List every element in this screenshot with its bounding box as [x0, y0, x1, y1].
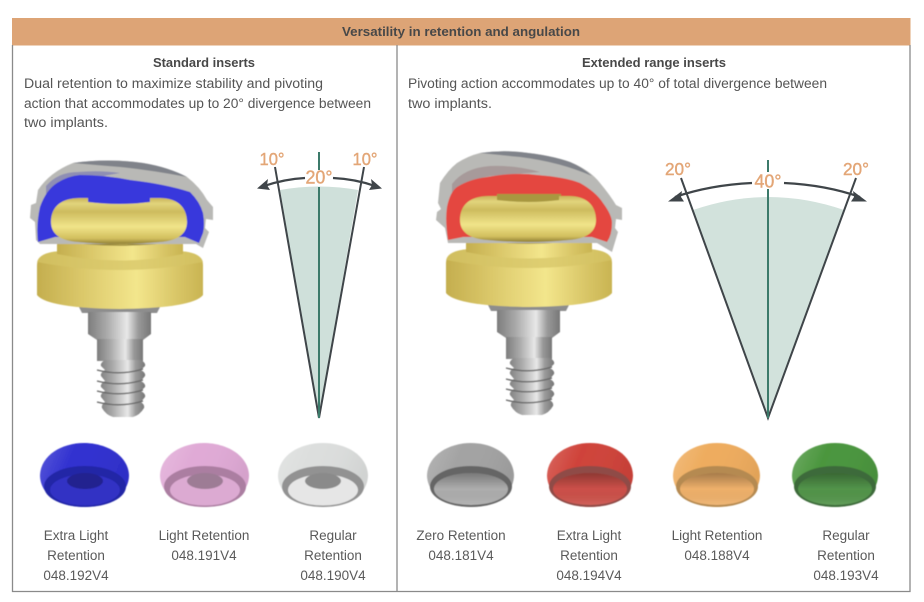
description: standard inserts: action that accommodates up to 20° divergence between: [24, 96, 371, 111]
label: light retention 048.188V4: [672, 528, 762, 563]
insert: grey zero: [427, 443, 514, 507]
label: extra light retention 048.194V4: Retention: [560, 548, 618, 563]
label: extra light retention 048.192V4: 048.192V4: [43, 568, 109, 583]
implant with red insert: [436, 151, 622, 415]
label: light retention 048.188V4: Light Retention: [672, 528, 762, 543]
label: regular retention 048.193V4: 048.193V4: [813, 568, 879, 583]
description: extended range inserts: two implants.: [408, 96, 492, 111]
insert: red extra light: [547, 443, 633, 507]
description: standard inserts: two implants.: [24, 115, 108, 130]
label: 20 degrees left: 20°: [665, 159, 691, 179]
insert: pink light: [160, 443, 249, 507]
label: extra light retention 048.194V4: Extra Light: [557, 528, 622, 543]
panel: standard inserts: [24, 56, 382, 583]
label: regular retention 048.190V4: Retention: [304, 548, 362, 563]
label: regular retention 048.190V4: [300, 528, 366, 583]
label: light retention 048.191V4: 048.191V4: [171, 548, 237, 563]
heading: extended range inserts: Extended range inserts: [582, 56, 726, 70]
label: regular retention 048.193V4: Regular: [822, 528, 870, 543]
label: regular retention 048.190V4: Regular: [309, 528, 357, 543]
insert: silver regular: [278, 443, 368, 507]
header title: Versatility in retention and angulation: [342, 25, 580, 39]
insert: blue extra light: [40, 443, 129, 507]
label: extra light retention 048.192V4: [43, 528, 109, 583]
label: 10 degrees left: 10°: [260, 149, 284, 169]
description: standard inserts: [24, 76, 371, 130]
label: extra light retention 048.194V4: 048.194V4: [556, 568, 622, 583]
label: light retention 048.188V4: 048.188V4: [684, 548, 750, 563]
label: zero retention 048.181V4: 048.181V4: [428, 548, 494, 563]
implant with blue insert: [30, 160, 213, 417]
angle diagram: 40 degrees: [665, 159, 869, 418]
description: standard inserts: Dual retention to maximize stability and pivoting: [24, 76, 323, 91]
label: 20 degrees total: 20°: [306, 168, 332, 188]
label: regular retention 048.193V4: Retention: [817, 548, 875, 563]
heading: standard inserts: Standard inserts: [153, 56, 255, 70]
label: regular retention 048.190V4: 048.190V4: [300, 568, 366, 583]
header bar: [12, 18, 910, 46]
description: extended range inserts: [408, 76, 827, 111]
description: extended range inserts: Pivoting action accommodates up to 40° of total divergence between: [408, 76, 827, 91]
label: 20 degrees right: 20°: [843, 159, 869, 179]
label: 40 degrees total: 40°: [754, 172, 782, 192]
insert: green regular: [792, 443, 878, 507]
insert: orange light: [673, 443, 760, 507]
label: extra light retention 048.192V4: Retention: [47, 548, 105, 563]
label: light retention 048.191V4: Light Retention: [159, 528, 249, 543]
label: zero retention 048.181V4: Zero Retention: [416, 528, 506, 543]
angle diagram: 20 degrees: [257, 149, 382, 418]
label: zero retention 048.181V4: [416, 528, 506, 563]
label: light retention 048.191V4: [159, 528, 249, 563]
panel: extended range inserts: [408, 56, 879, 583]
label: regular retention 048.193V4: [813, 528, 879, 583]
label: 10 degrees right: 10°: [352, 149, 378, 169]
label: extra light retention 048.192V4: Extra Light: [44, 528, 109, 543]
label: extra light retention 048.194V4: [556, 528, 622, 583]
